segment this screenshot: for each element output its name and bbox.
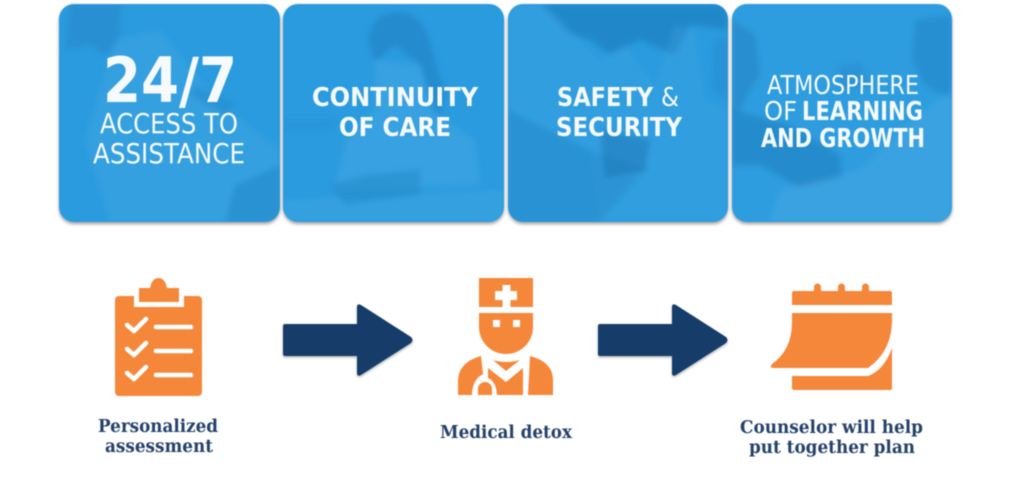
arrow: detox to plan: [598, 304, 728, 376]
icon: clipboard checklist: [115, 278, 202, 396]
label: personalized assessment: assessment: [105, 437, 213, 457]
label: counselor will help put together plan: Counselor will help: [740, 418, 923, 438]
atmosphere of learning and growth text: OF: [764, 97, 797, 127]
label: counselor will help put together plan: put together plan: [749, 438, 915, 458]
access to assistance text: ASSISTANCE: [93, 138, 245, 170]
arrow: assessment to detox: [283, 304, 412, 376]
step 1: personalized assessment: [98, 278, 218, 457]
24/7 figure: 24/7: [103, 44, 237, 117]
safety and security text: &: [661, 83, 679, 113]
label: counselor will help put together plan: [740, 418, 923, 458]
access to assistance text: ACCESS TO: [100, 108, 238, 140]
safety and security text: [556, 83, 683, 143]
panel: safety and security: [508, 4, 728, 222]
panel: continuity of care: [283, 4, 504, 222]
step 2: medical detox: [440, 278, 573, 443]
panel: 24/7 access to assistance: [59, 4, 280, 222]
label: personalized assessment: [98, 417, 218, 457]
continuity of care text: [312, 83, 479, 143]
atmosphere of learning and growth text: LEARNING: [802, 97, 923, 127]
safety and security text: SAFETY: [557, 83, 654, 113]
atmosphere of learning and growth text: ATMOSPHERE: [767, 71, 919, 101]
atmosphere of learning and growth text: [761, 71, 925, 154]
step 3: counselor plan: [740, 284, 923, 458]
icon: doctor: [458, 278, 553, 395]
access to assistance text: [93, 108, 245, 170]
atmosphere of learning and growth text: AND GROWTH: [761, 124, 925, 154]
label: medical detox: Medical detox: [440, 423, 573, 443]
icon: calendar: [771, 284, 892, 390]
label: personalized assessment: Personalized: [98, 417, 218, 437]
panel: atmosphere of learning and growth: [732, 4, 952, 222]
continuity of care text: CONTINUITY: [312, 83, 479, 113]
continuity of care text: OF CARE: [339, 113, 451, 143]
safety and security text: SECURITY: [556, 113, 683, 143]
